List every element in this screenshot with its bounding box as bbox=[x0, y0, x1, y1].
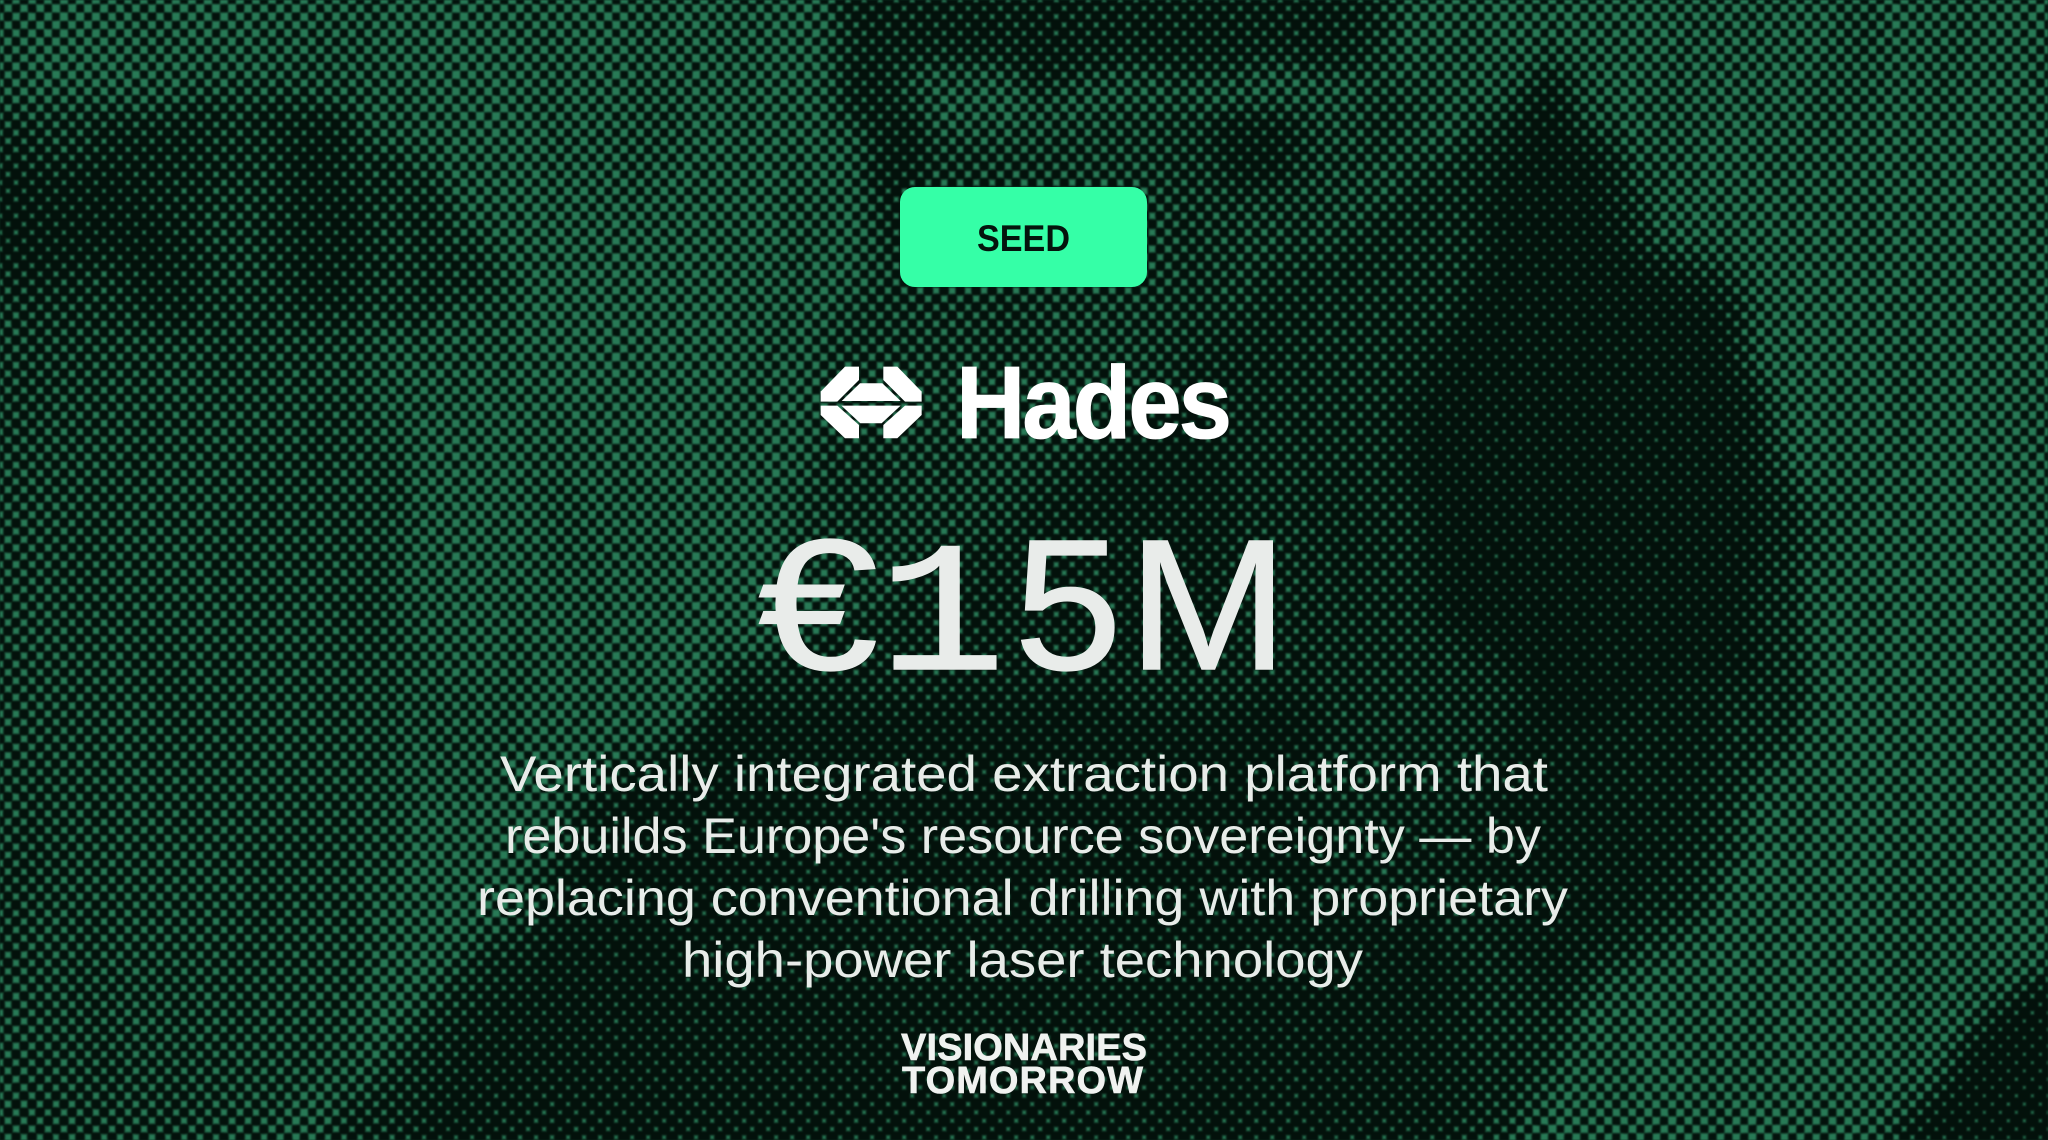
description: replacing conventional drilling with proprietary bbox=[477, 870, 1568, 926]
footer logo: Visionaries Tomorrow bbox=[901, 1027, 1147, 1102]
description bbox=[477, 746, 1568, 988]
amount: €15M bbox=[758, 502, 1288, 725]
footer logo: Visionaries Tomorrow: TOMORROW bbox=[902, 1060, 1143, 1102]
amount: €15M: 1 bbox=[878, 514, 1006, 725]
logo: Hades bbox=[821, 346, 1232, 461]
badge: SEED bbox=[900, 187, 1147, 287]
description: Vertically integrated extraction platform that bbox=[500, 746, 1548, 802]
wordmark: Hades bbox=[956, 346, 1232, 461]
icon: Hades mark bbox=[821, 367, 922, 438]
description: high-power laser technology bbox=[682, 932, 1363, 988]
amount: €15M: M bbox=[1128, 502, 1288, 709]
amount: €15M: € bbox=[758, 502, 878, 709]
description: rebuilds Europe's resource sovereignty — by bbox=[505, 808, 1541, 864]
amount: €15M: 5 bbox=[1014, 502, 1122, 709]
badge: SEED: SEED bbox=[977, 218, 1070, 259]
footer logo: Visionaries Tomorrow: VISIONARIES bbox=[901, 1027, 1147, 1069]
